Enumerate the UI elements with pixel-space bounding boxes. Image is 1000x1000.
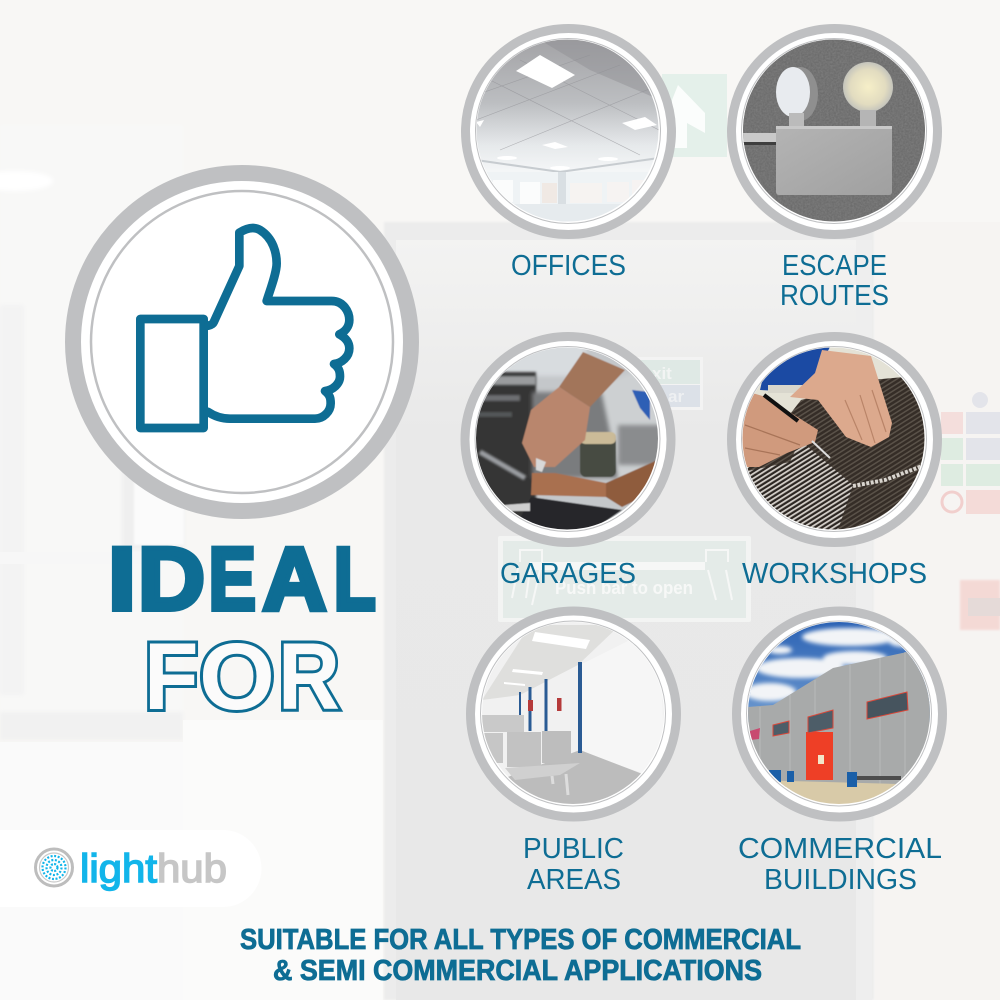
- inner ring: [475, 346, 660, 532]
- photo: mechanic hands in engine: [476, 348, 658, 530]
- heading: FOR: F: [144, 624, 198, 730]
- label: PUBLIC: [523, 833, 624, 865]
- label: WORKSHOPS: [742, 558, 927, 590]
- panel: public areas: [470, 611, 676, 896]
- signs: safety notices on right wall: [941, 392, 1000, 514]
- ring: [732, 28, 938, 234]
- photo: waiting area: [482, 622, 665, 810]
- panel: commercial buildings: [736, 611, 942, 896]
- photo: emergency light on wall: [743, 39, 926, 222]
- sign: fire exit text: ar: [668, 387, 684, 406]
- heading: IDEAL: I: [108, 528, 136, 628]
- badge inner ring: [91, 191, 393, 493]
- sign: fire exit text: xit: [652, 364, 672, 383]
- label: GARAGES: [500, 558, 636, 590]
- logo pill: lighthub: [0, 830, 262, 907]
- label: ESCAPE: [782, 250, 887, 282]
- ring: [470, 611, 676, 817]
- label: [738, 833, 942, 896]
- photo: industrial building: [744, 622, 935, 810]
- badge ring: [73, 173, 411, 511]
- ring: [465, 336, 671, 542]
- panel: escape routes: [732, 28, 938, 312]
- footer text: & SEMI COMMERCIAL APPLICATIONS: [273, 955, 762, 987]
- sign: push bar to open: [498, 536, 751, 622]
- inner ring: [746, 621, 932, 806]
- ring: [732, 336, 938, 542]
- label: [780, 250, 889, 312]
- pill background: [0, 830, 262, 907]
- sign: fire exit text: [625, 357, 703, 410]
- sign: push bar to open: Push bar to open: [555, 578, 693, 598]
- sign: exit arrow: [662, 74, 727, 157]
- inner ring: [480, 621, 666, 806]
- label: OFFICES: [511, 250, 626, 282]
- heading: FOR: [144, 624, 340, 730]
- heading: IDEAL: A: [262, 528, 326, 628]
- sign: fire panel: [960, 580, 1000, 630]
- photo: hands on carbon fibre: [742, 347, 926, 532]
- inner ring: [476, 38, 660, 224]
- label: COMMERCIAL: [738, 833, 942, 865]
- main badge: thumbs up: [73, 173, 411, 511]
- label: [523, 833, 624, 896]
- inner ring: [742, 38, 926, 224]
- inner ring: [742, 346, 926, 532]
- heading: FOR: O: [199, 624, 275, 730]
- label: BUILDINGS: [764, 864, 917, 896]
- panel: offices: [466, 28, 672, 282]
- label: ROUTES: [780, 280, 889, 312]
- heading: IDEAL: E: [208, 528, 256, 628]
- icon: thumbs up: [140, 228, 349, 428]
- label: AREAS: [527, 864, 621, 896]
- panel: garages: [465, 336, 671, 590]
- logo icon: [36, 849, 72, 886]
- photo: office ceiling: [476, 39, 660, 222]
- heading: IDEAL: L: [334, 528, 376, 628]
- ring: [736, 611, 942, 817]
- heading: IDEAL: D: [138, 528, 205, 628]
- ring: [466, 28, 672, 234]
- heading: FOR: R: [278, 624, 340, 730]
- logo wordmark: lighthub: [80, 847, 227, 891]
- panel: workshops: [732, 336, 938, 590]
- footer text: SUITABLE FOR ALL TYPES OF COMMERCIAL: [240, 924, 801, 956]
- heading: IDEAL: [108, 528, 376, 628]
- footer text: [240, 924, 801, 987]
